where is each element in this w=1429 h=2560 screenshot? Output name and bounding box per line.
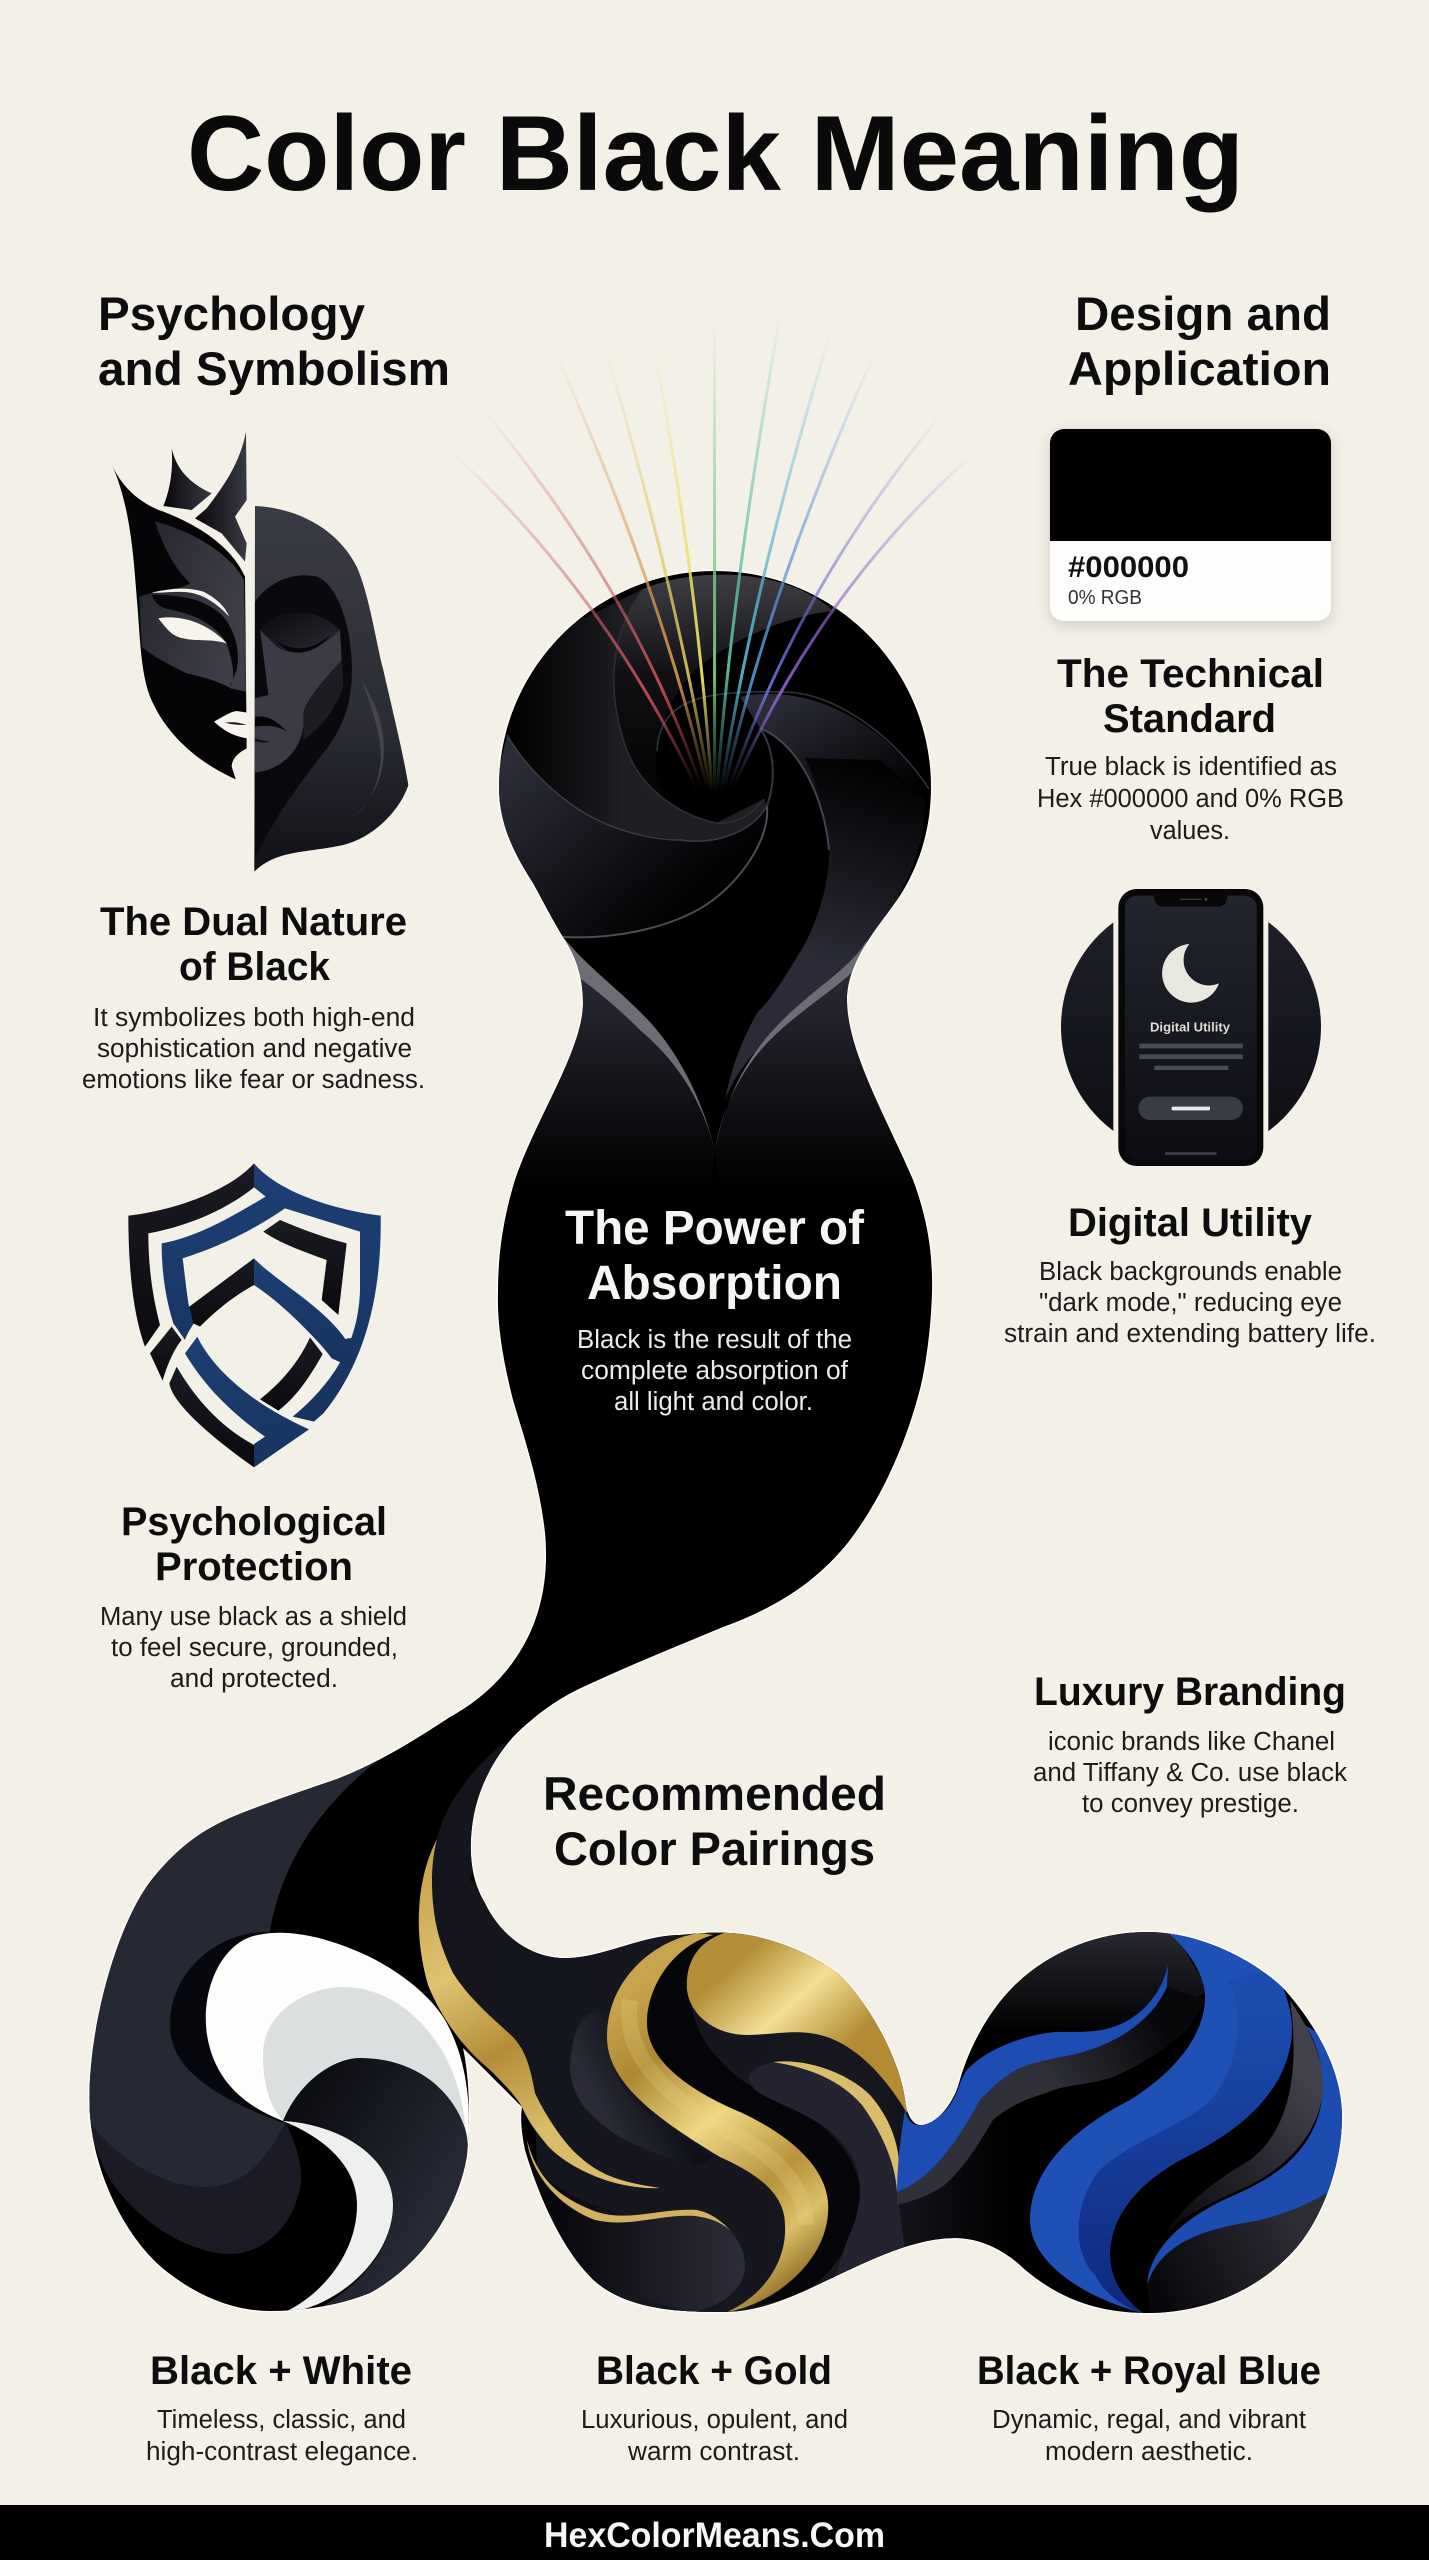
title: Color Black Meaning — [187, 93, 1244, 213]
panel: the technical standard — [1037, 652, 1344, 845]
pairing label: black + royal blue: modern aesthetic. — [1045, 2438, 1253, 2466]
panel: the technical standard: True black is identified as — [1045, 753, 1337, 781]
panel: the power of absorption: all light and color. — [614, 1388, 813, 1416]
panel: luxury branding — [1033, 1670, 1347, 1818]
panel: psychological protection: Psychological — [121, 1500, 387, 1544]
panel: the technical standard: Hex #000000 and 0% RGB — [1037, 785, 1344, 813]
panel: digital utility — [1004, 1201, 1376, 1348]
panel: psychological protection: Many use black as a shield — [100, 1603, 407, 1631]
panel: luxury branding: iconic brands like Chanel — [1048, 1728, 1335, 1756]
swirl head and lower pairing blobs — [50, 575, 1360, 2330]
color swatch card: 0% RGB — [1068, 587, 1142, 609]
pairing label: black + royal blue: Black + Royal Blue — [977, 2349, 1321, 2393]
footer bar — [0, 2505, 1429, 2560]
pairing label: black + white: Timeless, classic, and — [157, 2406, 406, 2434]
pairing label: black + gold: Luxurious, opulent, and — [581, 2406, 848, 2434]
panel: digital utility: Black backgrounds enable — [1039, 1258, 1342, 1286]
panel: the dual nature of black: It symbolizes both high-end — [93, 1004, 415, 1032]
pairing label: black + white: Black + White — [150, 2349, 412, 2393]
heading: design and application — [1068, 288, 1331, 396]
icon: phone in dark mode — [1061, 889, 1321, 1166]
panel: psychological protection: to feel secure, grounded, — [111, 1634, 398, 1662]
panel: luxury branding: to convey prestige. — [1082, 1790, 1299, 1818]
color swatch card: #000000 — [1068, 551, 1189, 584]
panel: the dual nature of black: of Black — [179, 945, 331, 989]
panel: the power of absorption: Black is the result of the — [577, 1326, 852, 1354]
heading: psychology and symbolism — [98, 288, 450, 396]
heading: recommended color pairings: Recommended — [543, 1768, 886, 1821]
panel: the technical standard: Standard — [1103, 697, 1276, 741]
panel: digital utility: Digital Utility — [1068, 1201, 1313, 1245]
panel: luxury branding: and Tiffany & Co. use black — [1033, 1759, 1347, 1787]
pairing label: black + royal blue: Dynamic, regal, and vibrant — [992, 2406, 1306, 2434]
rainbow light rays — [455, 310, 972, 792]
footer bar: HexColorMeans.Com — [544, 2516, 885, 2555]
panel: luxury branding: Luxury Branding — [1034, 1670, 1346, 1714]
panel: the power of absorption: complete absorption of — [581, 1357, 849, 1385]
icon: dual mask and hooded face — [112, 432, 408, 872]
panel: psychological protection: Protection — [155, 1545, 353, 1589]
pairing label: black + white: high-contrast elegance. — [146, 2438, 418, 2466]
black + royal blue blob — [897, 1932, 1342, 2313]
panel: the technical standard: values. — [1150, 817, 1230, 845]
black + white blob — [89, 1760, 469, 2310]
panel: digital utility: "dark mode," reducing eye — [1039, 1289, 1342, 1317]
icon: phone in dark mode: Digital Utility — [1150, 1020, 1231, 1035]
panel: the dual nature of black: emotions like fear or sadness. — [82, 1066, 425, 1094]
panel: the power of absorption — [565, 1202, 865, 1416]
panel: the dual nature of black: The Dual Nature — [100, 900, 407, 944]
icon: interlaced shield — [128, 1163, 381, 1467]
panel: psychological protection: and protected. — [170, 1665, 338, 1693]
heading: recommended color pairings: Color Pairings — [554, 1823, 875, 1876]
panel: the power of absorption: Absorption — [587, 1257, 842, 1310]
heading: psychology and symbolism: Psychology — [98, 288, 366, 341]
pairing label: black + royal blue — [977, 2349, 1321, 2466]
heading: design and application: Design and — [1075, 288, 1331, 341]
pairing label: black + gold: warm contrast. — [627, 2438, 800, 2466]
central flowing black figure — [50, 571, 1360, 2330]
panel: the dual nature of black: sophistication and negative — [97, 1035, 412, 1063]
heading: recommended color pairings — [543, 1768, 886, 1876]
panel: psychological protection — [100, 1500, 407, 1693]
panel: the power of absorption: The Power of — [565, 1202, 865, 1255]
panel: digital utility: strain and extending battery life. — [1004, 1320, 1376, 1348]
heading: design and application: Application — [1068, 343, 1331, 396]
pairing label: black + gold — [581, 2349, 848, 2466]
pairing label: black + gold: Black + Gold — [596, 2349, 832, 2393]
heading: psychology and symbolism: and Symbolism — [98, 343, 450, 396]
pairing label: black + white — [146, 2349, 418, 2466]
black + gold blob — [419, 1742, 1010, 2320]
panel: the technical standard: The Technical — [1057, 652, 1324, 696]
color swatch card — [1050, 429, 1331, 621]
panel: the dual nature of black — [82, 900, 425, 1094]
